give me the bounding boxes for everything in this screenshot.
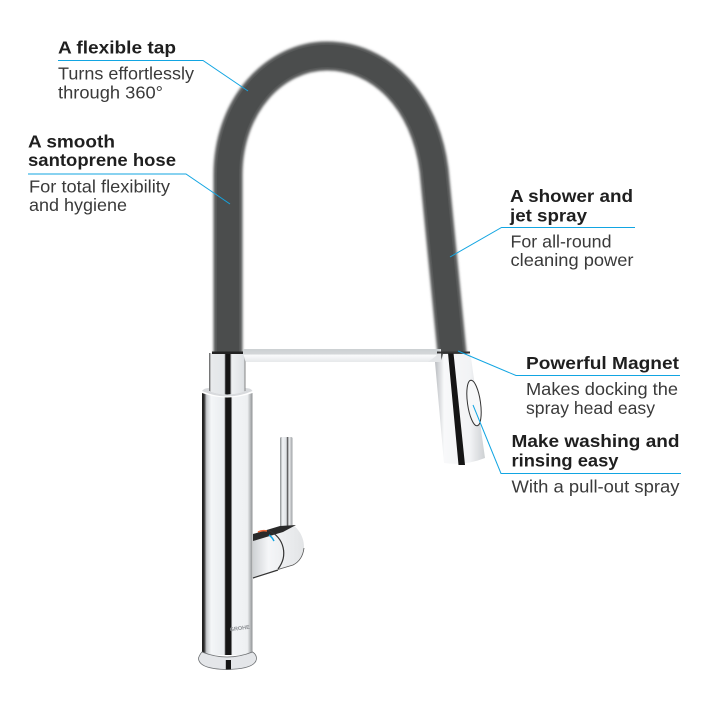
callout: washing and rinsing: Make washing and (512, 431, 680, 451)
foot (198, 652, 256, 670)
callout: shower and jet spray: A shower and (510, 186, 633, 206)
callout: powerful magnet (458, 351, 680, 418)
callout: shower and jet spray: cleaning power (510, 250, 634, 270)
callout: santoprene hose: For total flexibility (29, 176, 170, 196)
spray head (435, 354, 485, 464)
lever (280, 437, 292, 529)
callout: a flexible tap (58, 38, 248, 102)
callout: a flexible tap: through 360° (58, 82, 163, 102)
callout: washing and rinsing: rinsing easy (512, 450, 619, 470)
hose (228, 56, 452, 358)
callout: powerful magnet: Powerful Magnet (526, 353, 679, 373)
white mask below hose (205, 353, 209, 361)
callout: a flexible tap: Turns effortlessly (58, 64, 194, 84)
callout: santoprene hose: A smooth (28, 132, 115, 152)
logo mark: GROHE (229, 625, 251, 633)
callout: santoprene hose: and hygiene (29, 195, 127, 215)
callout: santoprene hose: santoprene hose (28, 150, 176, 170)
spout bar (243, 349, 441, 362)
callout: washing and rinsing (473, 405, 681, 496)
callout: washing and rinsing: With a pull-out spray (512, 476, 680, 496)
main body (202, 393, 252, 655)
callout: shower and jet spray: jet spray (509, 206, 587, 226)
faucet (198, 56, 485, 670)
callout: powerful magnet: spray head easy (526, 398, 655, 418)
callout: powerful magnet: Makes docking the (526, 379, 678, 399)
upper collar (209, 353, 246, 394)
mixer (253, 525, 304, 578)
callout: a flexible tap: A flexible tap (58, 38, 176, 58)
callout: santoprene hose (28, 132, 230, 215)
callout: shower and jet spray: For all-round (510, 232, 612, 252)
callout: shower and jet spray (450, 186, 635, 270)
